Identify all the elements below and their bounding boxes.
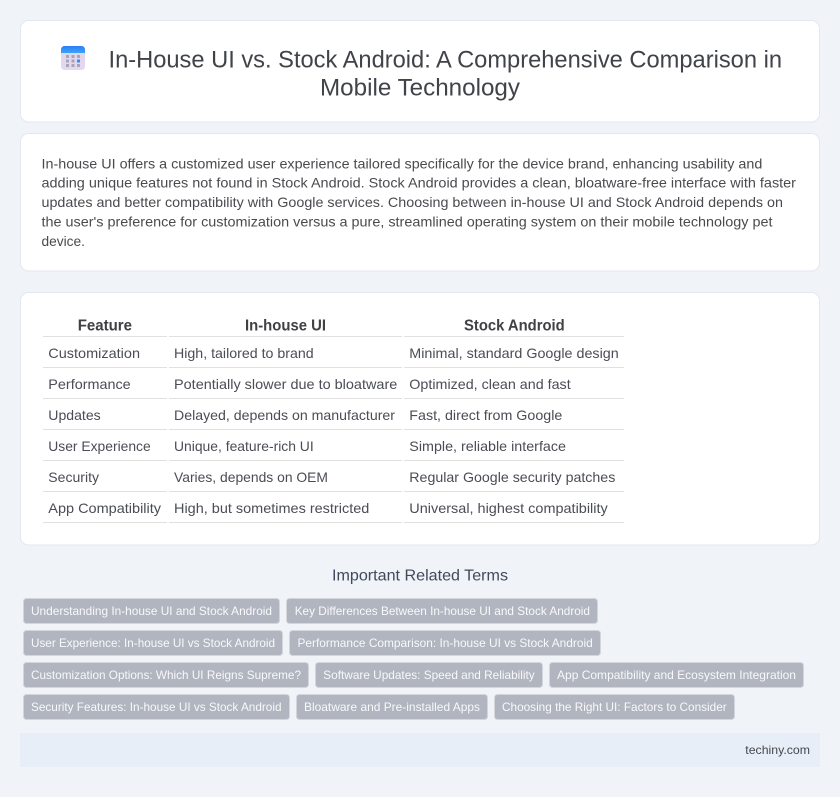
table row: customization: Customization (48, 345, 140, 361)
table row: app compatibility (43, 500, 624, 523)
footer: techiny.com (745, 743, 810, 757)
tag (286, 598, 598, 624)
table row: updates: Fast, direct from Google (409, 407, 563, 423)
title: In-House UI vs. Stock Android: A Comprehensive Comparison in (108, 46, 782, 74)
table row: user experience: User Experience (48, 438, 151, 454)
tag (290, 630, 600, 656)
table row: security: Varies, depends on OEM (174, 469, 328, 485)
table row: performance: Optimized, clean and fast (409, 376, 571, 392)
tag (316, 662, 542, 688)
table header row: In-house UI (245, 318, 326, 335)
text block: summary: adding unique features not found in Stock Android. Stock Android provides a clean, bloatware-free interface with faster (42, 174, 796, 190)
table row: updates: Delayed, depends on manufacturer (174, 407, 395, 423)
footer (20, 733, 820, 767)
table row: updates: Updates (48, 407, 101, 423)
table row: performance: Potentially slower due to bloatware (174, 376, 398, 392)
table row: customization: High, tailored to brand (174, 345, 314, 361)
text block: summary: In-house UI offers a customized user experience tailored specifically for the device brand, enhancing usability and (42, 155, 762, 171)
table header row: Feature (78, 318, 132, 335)
text block: summary: device. (42, 233, 85, 249)
panel: related term tags (24, 598, 804, 720)
text block: summary (42, 155, 796, 249)
table row: performance (43, 376, 624, 399)
table row: customization (43, 345, 624, 368)
table row: app compatibility: App Compatibility (48, 500, 161, 516)
tag (24, 598, 280, 624)
tag (494, 694, 734, 720)
icon: calendar (61, 46, 85, 70)
heading: related terms: Important Related Terms (332, 568, 508, 585)
tag: Understanding In-house UI and Stock Android (31, 604, 272, 618)
table header row: Stock Android (464, 318, 565, 335)
tag (296, 694, 488, 720)
table row: user experience (43, 438, 624, 461)
panel: header (20, 20, 820, 122)
table row: customization: Minimal, standard Google design (409, 345, 619, 361)
table row: user experience: Unique, feature-rich UI (174, 438, 314, 454)
title (108, 46, 782, 102)
panel: comparison table (20, 292, 820, 545)
table row: security: Regular Google security patches (409, 469, 615, 485)
tag: User Experience: In-house UI vs Stock Android (31, 636, 275, 650)
tag (24, 630, 282, 656)
tag: Performance Comparison: In-house UI vs Stock Android (298, 636, 593, 650)
table row: user experience: Simple, reliable interface (409, 438, 566, 454)
table row: updates (43, 407, 624, 430)
table row: app compatibility: Universal, highest compatibility (409, 500, 608, 516)
table row: security: Security (48, 469, 99, 485)
tag (550, 662, 804, 688)
text block: summary: updates and better compatibility with Google services. Choosing between in-house UI and Stock Android depends on (42, 194, 783, 210)
tag: Bloatware and Pre-installed Apps (304, 700, 480, 714)
tag: Key Differences Between In-house UI and Stock Android (295, 604, 590, 618)
table header row (43, 318, 624, 337)
tag (24, 694, 290, 720)
table row: app compatibility: High, but sometimes restricted (174, 500, 369, 516)
tag: App Compatibility and Ecosystem Integration (557, 668, 796, 682)
tag: Software Updates: Speed and Reliability (323, 668, 535, 682)
tag: Customization Options: Which UI Reigns Supreme? (31, 668, 301, 682)
title: Mobile Technology (320, 74, 520, 102)
table row: security (43, 469, 624, 492)
panel: summary paragraph (20, 134, 820, 271)
tag (24, 662, 308, 688)
tag: Security Features: In-house UI vs Stock Android (31, 700, 282, 714)
tag: Choosing the Right UI: Factors to Consider (502, 700, 727, 714)
text block: summary: the user's preference for customization versus a pure, streamlined operating system on their mobile technology pet (42, 214, 773, 230)
table row: performance: Performance (48, 376, 131, 392)
